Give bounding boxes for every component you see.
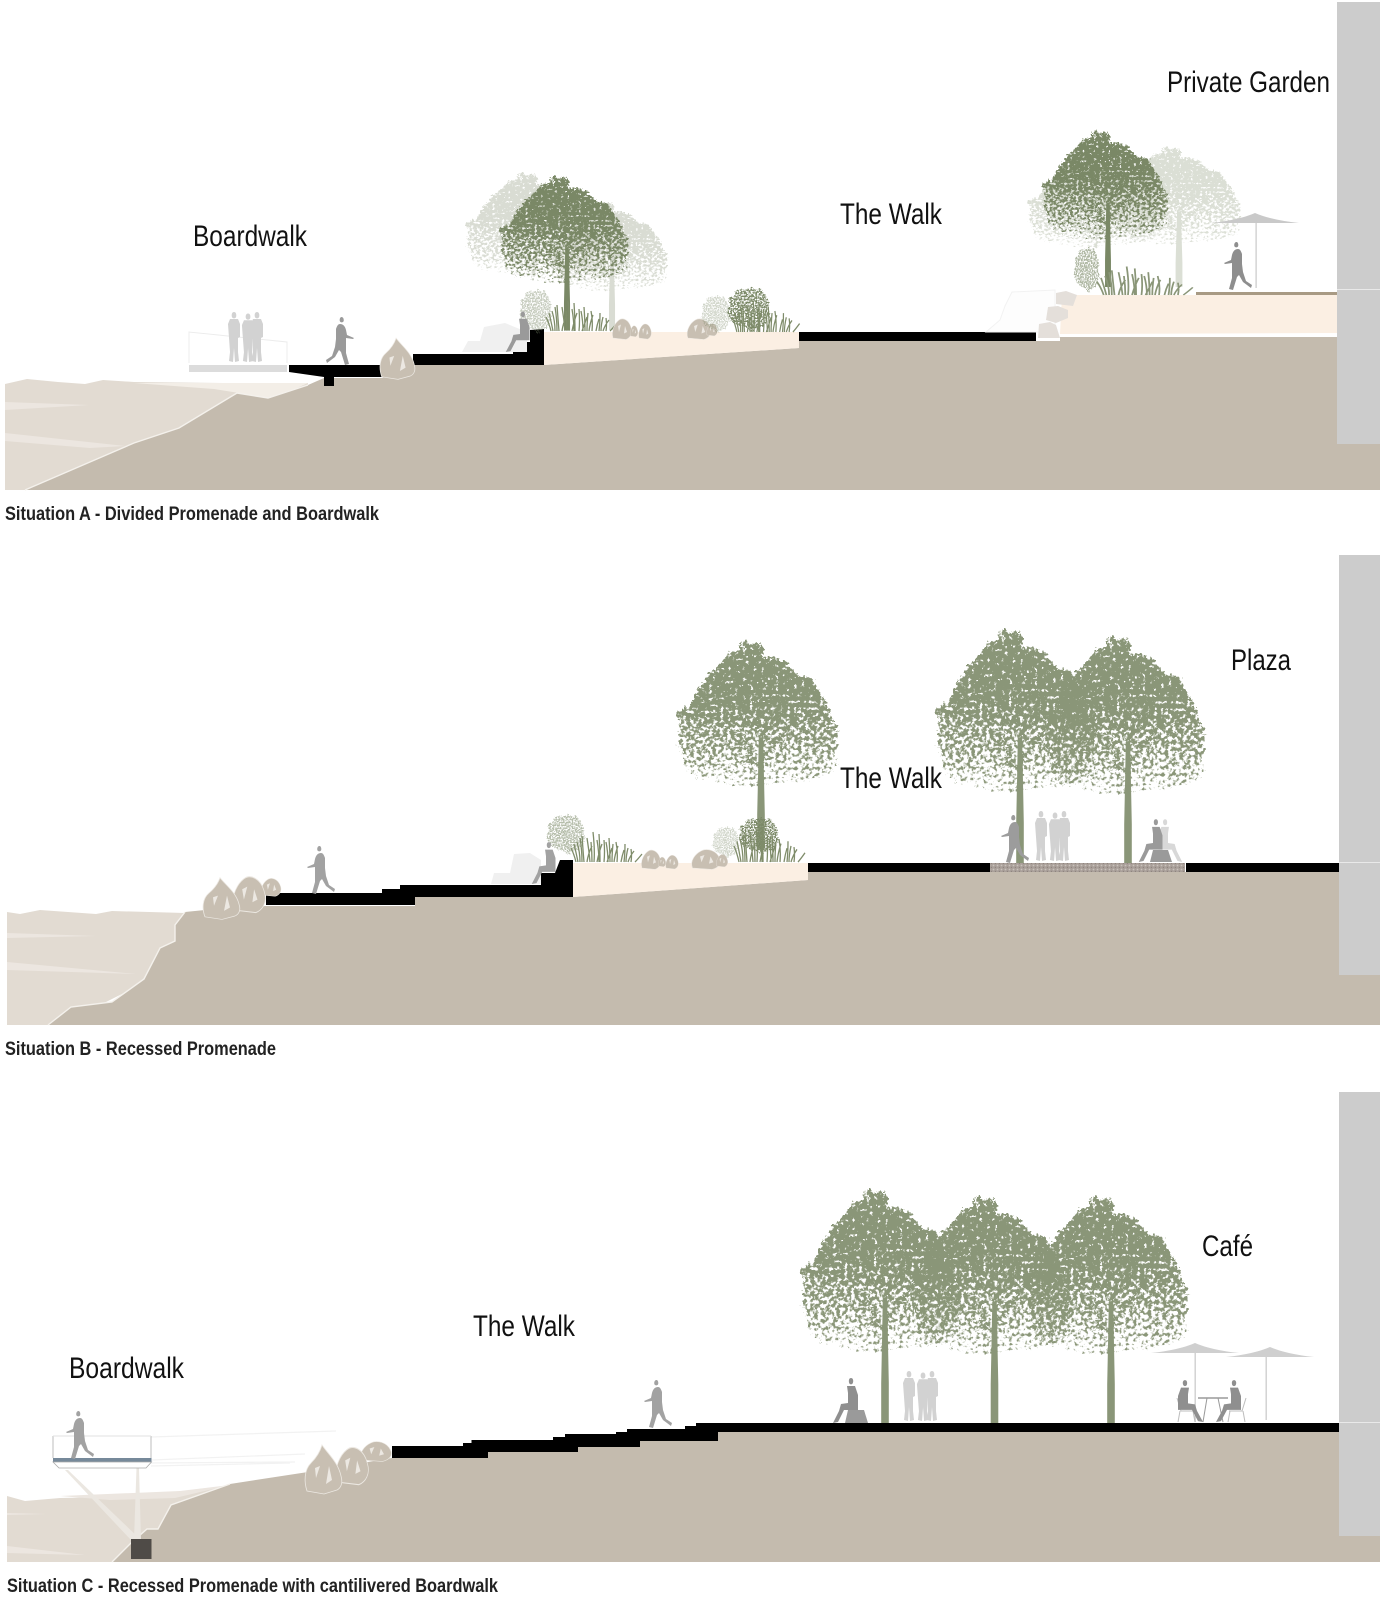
light steps B (491, 853, 541, 884)
ground A (25, 337, 1380, 490)
rocks A left cluster (612, 319, 651, 340)
shrubs B bed (713, 818, 779, 857)
rocks B small cluster (641, 850, 678, 869)
label: Cafe: Café (1202, 1230, 1253, 1263)
shrubs A bed (702, 288, 771, 332)
rocks A right cluster (687, 319, 717, 340)
rocks B second cluster (692, 850, 728, 869)
promenade black steps B (266, 860, 573, 905)
walker C boardwalk (66, 1411, 94, 1459)
tree A right (1042, 132, 1167, 287)
rocks B (203, 877, 281, 919)
building C (1339, 1092, 1380, 1536)
panel: Situation C section (7, 1092, 1380, 1597)
foundation block C (131, 1539, 152, 1559)
grasses B bed (734, 828, 805, 862)
grasses A bed (732, 300, 800, 332)
promenade black A lower (289, 365, 382, 386)
rocks C (305, 1442, 391, 1494)
seated people B (1139, 819, 1182, 862)
panel: Situation B section (5, 555, 1380, 1060)
umbrella A (1211, 213, 1299, 288)
The Walk black B (808, 863, 990, 872)
tree C2 (909, 1199, 1070, 1423)
caption B: Situation B - Recessed Promenade (5, 1039, 276, 1060)
people group A (228, 312, 263, 362)
label: Private Garden: Private Garden (1167, 66, 1330, 99)
panel: Situation A section (5, 2, 1380, 525)
light steps A (462, 323, 527, 352)
water body A (5, 379, 308, 490)
cantilevered boardwalk C (53, 1436, 152, 1468)
label: Boardwalk C: Boardwalk (69, 1352, 185, 1385)
faint sight lines C (151, 1431, 336, 1466)
label: The Walk C: The Walk (473, 1310, 576, 1343)
seating steps black A (413, 329, 544, 365)
building B (1339, 555, 1380, 975)
background trees A left (465, 174, 667, 330)
label: Boardwalk A: Boardwalk (193, 220, 308, 253)
stepped promenade black C (392, 1423, 1339, 1458)
boardwalk deck and railing A (189, 332, 287, 372)
tree B1 (676, 643, 837, 850)
tree C3 (1026, 1199, 1187, 1423)
tree B3 (1043, 639, 1204, 863)
walker A (326, 317, 354, 365)
walker B plaza (1001, 815, 1029, 863)
caption A: Situation A - Divided Promenade and Boardwalk (5, 504, 379, 525)
walker C promenade (644, 1380, 672, 1428)
grasses A (546, 301, 617, 331)
ground C (112, 1432, 1380, 1562)
water body B (7, 910, 190, 1025)
umbrellas C (1151, 1343, 1314, 1422)
paving B (990, 863, 1185, 872)
tree A main (499, 178, 628, 330)
light steps A garden (986, 290, 1055, 332)
garden deck line A (1196, 292, 1337, 295)
seated person C (833, 1378, 868, 1423)
struts C (65, 1468, 141, 1540)
cafe table and chairs C (1177, 1398, 1246, 1422)
grasses B (571, 832, 642, 862)
walker A garden (1224, 242, 1252, 290)
ground B (48, 872, 1380, 1025)
seated person B (532, 842, 556, 884)
shoreline B (48, 912, 185, 1025)
The Walk black surface A (799, 332, 1036, 341)
label: The Walk B: The Walk (840, 762, 943, 795)
building A (1337, 2, 1380, 444)
label: The Walk A: The Walk (840, 198, 943, 231)
seated person A (506, 312, 530, 352)
walker B (307, 846, 335, 894)
stone wall A (1038, 291, 1077, 338)
caption C: Situation C - Recessed Promenade with cantilivered Boardwalk (7, 1576, 498, 1597)
shrub B (547, 815, 585, 853)
shrub A behind bench (520, 290, 552, 332)
raised garden bed A (1060, 295, 1337, 334)
label: Plaza: Plaza (1231, 644, 1291, 677)
water body C (7, 1485, 240, 1562)
tree B2 (935, 632, 1096, 863)
people group B (1035, 811, 1070, 861)
cafe seated people C (1178, 1380, 1241, 1422)
The Walk black B right (1186, 863, 1339, 872)
shoreline C (112, 1484, 230, 1562)
shrub A right (1074, 248, 1100, 291)
tree C1 (800, 1192, 961, 1423)
planting bed lower A (544, 332, 799, 365)
shoreline A (25, 385, 308, 490)
people group C (903, 1371, 938, 1421)
rock A (380, 338, 415, 379)
background trees A right (1027, 148, 1240, 287)
planting bed B (573, 863, 808, 897)
grasses A right (1097, 266, 1193, 295)
